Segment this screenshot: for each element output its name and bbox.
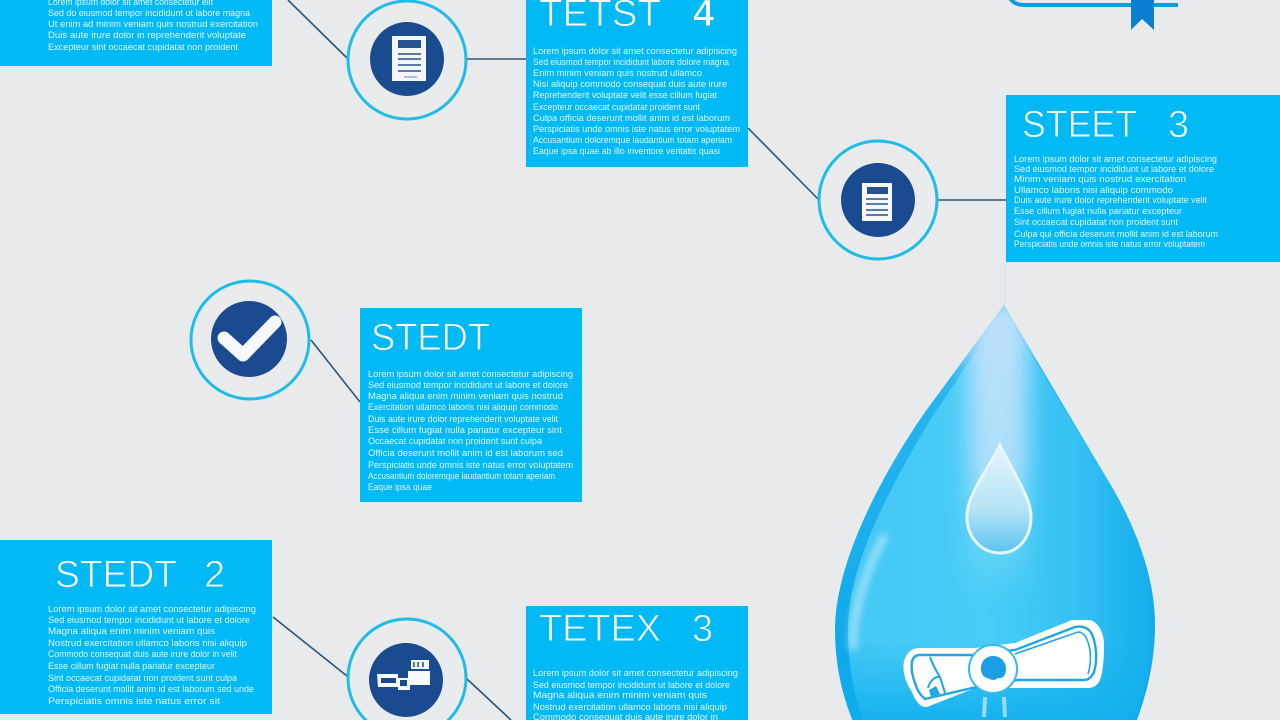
seal emblem — [981, 656, 1006, 680]
panel: STEET 3 card: Duis aute irure dolor reprehenderit voluptate velit — [1014, 195, 1207, 205]
panel: TETEX 3 card: Sed eiusmod tempor incididunt ut labore et dolore — [533, 680, 730, 690]
panel: top-left step card: Sed do eiusmod tempor incididunt ut labore magna — [48, 8, 250, 18]
panel: TETST 4 card: Enim minim veniam quis nostrud ullamco — [533, 68, 702, 78]
panel: STEDT card: Accusantium doloremque laudantium totam aperiam — [368, 471, 555, 481]
panel: STEDT card: Duis aute irure dolor reprehenderit voluptate velit — [368, 414, 558, 424]
panel: STEDT card: Esse cillum fugiat nulla pariatur excepteur sint — [368, 425, 563, 435]
panel: STEDT card: Magna aliqua enim minim veniam quis nostrud — [368, 391, 563, 401]
panel: TETEX 3 card: Nostrud exercitation ullamco laboris nisi aliquip — [533, 702, 727, 712]
panel: TETST 4 card: Eaque ipsa quae ab illo inventore veritatis quasi — [533, 146, 720, 156]
icon: diploma scroll with seal — [903, 620, 1104, 717]
heading: stedt 2: 2 — [204, 554, 225, 596]
highlight beam — [968, 300, 1028, 600]
heading: stedt 2: STEDT — [55, 554, 177, 596]
panel: TETEX 3 card: Magna aliqua enim minim veniam quis — [533, 690, 708, 700]
icon: document in ring — [348, 1, 466, 119]
panel: STEDT card: Lorem ipsum dolor sit amet consectetur adipiscing — [368, 369, 573, 379]
panel: top-left step card: Excepteur sint occaecat cupidatat non proident — [48, 42, 239, 52]
panel: STEDT card — [360, 308, 582, 502]
panel: TETST 4 card: Perspiciatis unde omnis iste natus error voluptatem — [533, 124, 740, 134]
illustration: large water drop — [835, 300, 1155, 720]
panel: TETST 4 card: Excepteur occaecat cupidatat proident sunt — [533, 102, 700, 112]
icon: check mark in ring — [191, 281, 309, 399]
panel: STEDT card: Officia deserunt mollit anim id est laborum sed — [368, 448, 563, 458]
panel: STEET 3 card: Ullamco laboris nisi aliquip commodo — [1014, 185, 1173, 195]
panel: top-left step card — [0, 0, 272, 66]
panel: STEDT 2 card — [0, 540, 272, 714]
panel: STEET 3 card: Perspiciatis unde omnis iste natus error voluptatem — [1014, 239, 1205, 249]
icon: form in ring — [819, 141, 937, 259]
small inner drop — [967, 445, 1031, 553]
panel: TETST 4 card — [526, 0, 748, 167]
panel: TETST 4 card: Accusantium doloremque laudantium totam aperiam — [533, 135, 732, 145]
panel: STEDT 2 card: Commodo consequat duis aute irure dolor in velit — [48, 649, 237, 659]
panel: STEDT 2 card: Perspiciatis omnis iste natus error sit — [48, 696, 221, 706]
left edge highlight — [853, 535, 885, 650]
panel: TETEX 3 card: Lorem ipsum dolor sit amet consectetur adipiscing — [533, 668, 738, 678]
panel: STEET 3 card: Lorem ipsum dolor sit amet consectetur adipiscing — [1014, 154, 1217, 164]
panel: TETST 4 card: Culpa officia deserunt mollit anim id est laborum — [533, 113, 730, 123]
panel: STEDT card: Perspiciatis unde omnis iste natus error voluptatem — [368, 460, 573, 470]
panel: STEDT 2 card: Officia deserunt mollit anim id est laborum sed unde — [48, 684, 254, 694]
panel: STEDT 2 card: Sed eiusmod tempor incididunt ut labore et dolore — [48, 615, 250, 625]
heading: steet 3: 3 — [1168, 104, 1189, 146]
panel: STEDT card: Eaque ipsa quae — [368, 482, 432, 492]
panel: STEDT 2 card: Esse cillum fugiat nulla pariatur excepteur — [48, 661, 215, 671]
heading: tetex 3: TETEX — [539, 608, 661, 650]
panel: STEET 3 card: Culpa qui officia deserunt mollit anim id est laborum — [1014, 229, 1218, 239]
panel: STEDT card: Occaecat cupidatat non proident sunt culpa — [368, 436, 542, 446]
panel: STEDT card: Exercitation ullamco laboris nisi aliquip commodo — [368, 402, 558, 412]
panel: STEET 3 card — [1006, 95, 1280, 262]
panel: STEET 3 card: Sint occaecat cupidatat non proident sunt — [1014, 217, 1178, 227]
panel: STEDT 2 card: Sint occaecat cupidatat non proident sunt culpa — [48, 673, 237, 683]
panel: top-left step card: Duis aute irure dolor in reprehenderit voluptate — [48, 30, 246, 40]
panel: STEET 3 card: Minim veniam quis nostrud exercitation — [1014, 174, 1186, 184]
connector lines — [273, 0, 1006, 720]
panel: TETST 4 card: Lorem ipsum dolor sit amet consectetur adipiscing — [533, 46, 737, 56]
panel: STEDT 2 card: Nostrud exercitation ullamco laboris nisi aliquip — [48, 638, 247, 648]
panel: TETST 4 card: Nisi aliquip commodo consequat duis aute irure — [533, 79, 727, 89]
icon: machinery in ring — [348, 619, 466, 720]
panel: TETST 4 card: Reprehenderit voluptate velit esse cillum fugiat — [533, 90, 717, 100]
panel: TETEX 3 card — [526, 606, 748, 720]
heading: tetex 3: 3 — [692, 608, 713, 650]
panel: STEDT 2 card: Magna aliqua enim minim veniam quis — [48, 626, 216, 636]
panel: TETST 4 card: Sed eiusmod tempor incididunt labore dolore magna — [533, 57, 729, 67]
panel: STEET 3 card: Sed eiusmod tempor incididunt ut labore et dolore — [1014, 164, 1214, 174]
panel: STEDT card: Sed eiusmod tempor incididunt ut labore et dolore — [368, 380, 568, 390]
panel: STEDT 2 card: Lorem ipsum dolor sit amet consectetur adipiscing — [48, 604, 256, 614]
heading: stedt: STEDT — [371, 317, 490, 359]
panel: STEET 3 card: Esse cillum fugiat nulla pariatur excepteur — [1014, 206, 1182, 216]
icon: ribbon and bookmark — [1009, 0, 1178, 30]
panel: top-left step card: Ut enim ad minim veniam quis nostrud exercitation — [48, 19, 258, 29]
heading: steet 3: STEET — [1022, 104, 1137, 146]
